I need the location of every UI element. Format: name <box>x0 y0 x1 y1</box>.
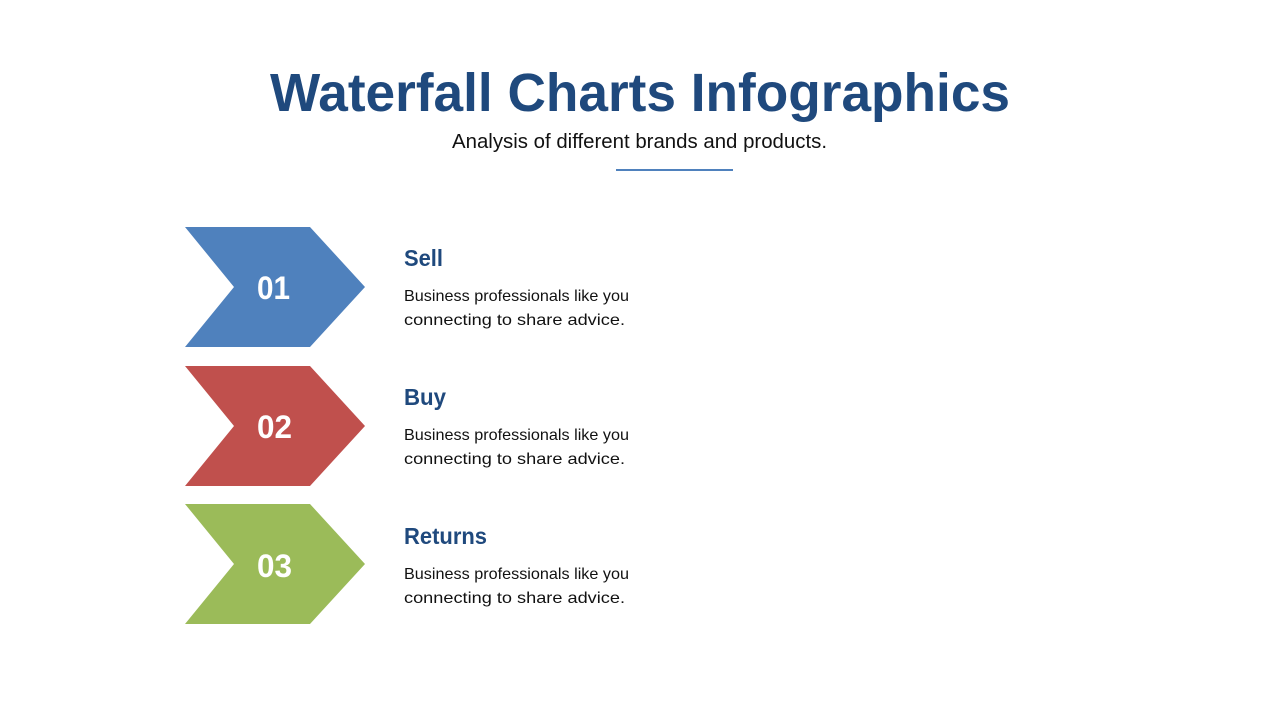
chevron: 03 <box>185 504 365 624</box>
text block: Buy description: connecting to share advice. <box>404 451 625 468</box>
text block: Sell description: connecting to share advice. <box>404 312 625 329</box>
text block: Returns description: connecting to share advice. <box>404 590 625 607</box>
chevron: 01 <box>185 227 365 347</box>
number: 03: 03 <box>257 548 292 584</box>
heading: Sell: Sell <box>404 245 443 271</box>
number: 02: 02 <box>257 409 292 445</box>
title: Waterfall Charts Infographics <box>270 63 1010 123</box>
text block: Buy description: Business professionals like you <box>404 427 629 444</box>
number: 01: 01 <box>257 270 290 306</box>
text block: Returns description: Business professionals like you <box>404 566 629 583</box>
panel: step 02 Buy <box>185 366 629 486</box>
panel: step 01 Sell <box>185 227 629 347</box>
title underline <box>616 169 733 171</box>
heading: Returns: Returns <box>404 523 487 549</box>
text block: Sell description: Business professionals like you <box>404 288 629 305</box>
subtitle: Analysis of different brands and products. <box>452 131 827 153</box>
chevron: 02 <box>185 366 365 486</box>
panel: step 03 Returns <box>185 504 629 624</box>
heading: Buy: Buy <box>404 384 446 410</box>
